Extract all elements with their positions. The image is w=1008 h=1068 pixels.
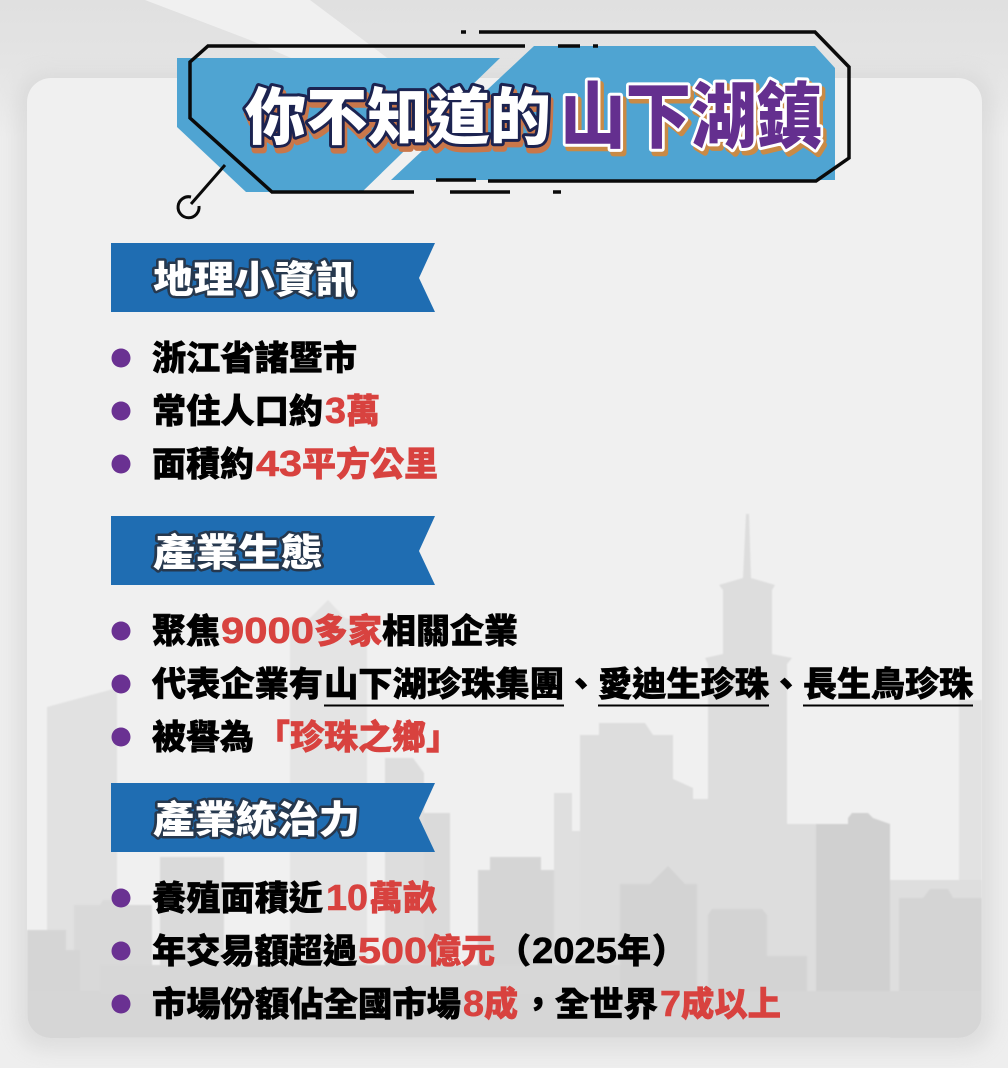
bullet list: industry dominance: （ <box>497 933 531 971</box>
bullet list: industry dominance: 500 <box>358 930 427 971</box>
bullet list: industry ecosystem: 「珍珠之鄉」 <box>256 718 460 757</box>
bullet list: industry ecosystem: 9000 <box>221 610 314 651</box>
bullet list: industry dominance: 養殖面積近 <box>152 880 323 918</box>
bullet list: industry dominance: 萬畝 <box>369 880 437 918</box>
bullet list: industry dominance: 成 <box>484 985 518 1024</box>
bullet list: industry ecosystem: 多家 <box>314 612 382 651</box>
left blue plate <box>177 58 500 192</box>
title text purple: 山下湖鎮 <box>563 82 825 162</box>
bullet list: industry dominance: 億元 <box>427 933 495 971</box>
bullet list: geography: 平方公里 <box>302 445 438 484</box>
bullet list: industry dominance: 全世界 <box>555 986 658 1024</box>
bullet list: geography: 43 <box>256 443 302 484</box>
title text purple: 山下湖鎮 <box>560 78 822 158</box>
bullet list: industry ecosystem: 相關企業 <box>382 613 518 651</box>
bullet list: industry dominance: 市場份額佔全國市場 <box>152 985 461 1024</box>
bullet list: industry ecosystem: 聚焦 <box>152 613 220 651</box>
bullet list: geography <box>112 339 438 484</box>
section heading: industry ecosystem <box>111 516 435 585</box>
bullet list: geography: 常住人口約 <box>152 393 323 431</box>
bullet list: geography: 3 <box>325 390 346 431</box>
bullet list: industry ecosystem: 長生鳥珍珠 <box>803 666 974 704</box>
bullet list: industry dominance: ， <box>521 986 555 1024</box>
bullet list: industry dominance: 10 <box>326 877 368 918</box>
title text white: 你不知道的 <box>247 89 553 158</box>
title banner <box>177 32 849 218</box>
section heading: industry dominance: 產業統治力 <box>153 800 360 842</box>
skyline silhouette <box>27 514 982 1040</box>
bullet list: industry dominance: 2025 <box>532 930 617 971</box>
section heading: industry dominance <box>111 783 435 852</box>
bullet list: geography: 萬 <box>346 393 380 431</box>
bullet list: industry dominance: 7 <box>660 983 681 1024</box>
bullet list: industry ecosystem: 被譽為 <box>152 719 254 757</box>
bullet list: industry dominance: 成以上 <box>681 985 781 1024</box>
bullet list: industry ecosystem: 、 <box>769 666 803 704</box>
right blue plate <box>391 46 835 180</box>
title text white: 你不知道的 <box>245 84 551 153</box>
section heading: industry ecosystem: 產業生態 <box>153 533 323 575</box>
bullet list: industry dominance: 8 <box>463 983 484 1024</box>
bullet list: industry dominance: ） <box>652 933 686 971</box>
bullet list: industry ecosystem: 愛迪生珍珠 <box>598 666 770 704</box>
section heading: geography <box>111 243 435 312</box>
bullet list: industry ecosystem: 、 <box>564 666 598 704</box>
bullet list: geography: 面積約 <box>152 446 254 484</box>
black frame left <box>190 46 525 192</box>
icon: hook connector <box>178 165 225 218</box>
black frame right <box>479 32 849 181</box>
bullet list: industry dominance: 年 <box>617 933 651 971</box>
bullet list: industry dominance <box>112 877 781 1024</box>
bullet list: industry ecosystem <box>112 610 974 757</box>
bullet list: industry dominance: 年交易額超過 <box>152 932 357 971</box>
bullet list: industry ecosystem: 山下湖珍珠集團 <box>324 666 564 704</box>
bullet list: geography: 浙江省諸暨市 <box>152 339 357 378</box>
section heading: geography: 地理小資訊 <box>153 260 356 302</box>
bullet list: industry ecosystem: 代表企業有 <box>152 666 323 704</box>
